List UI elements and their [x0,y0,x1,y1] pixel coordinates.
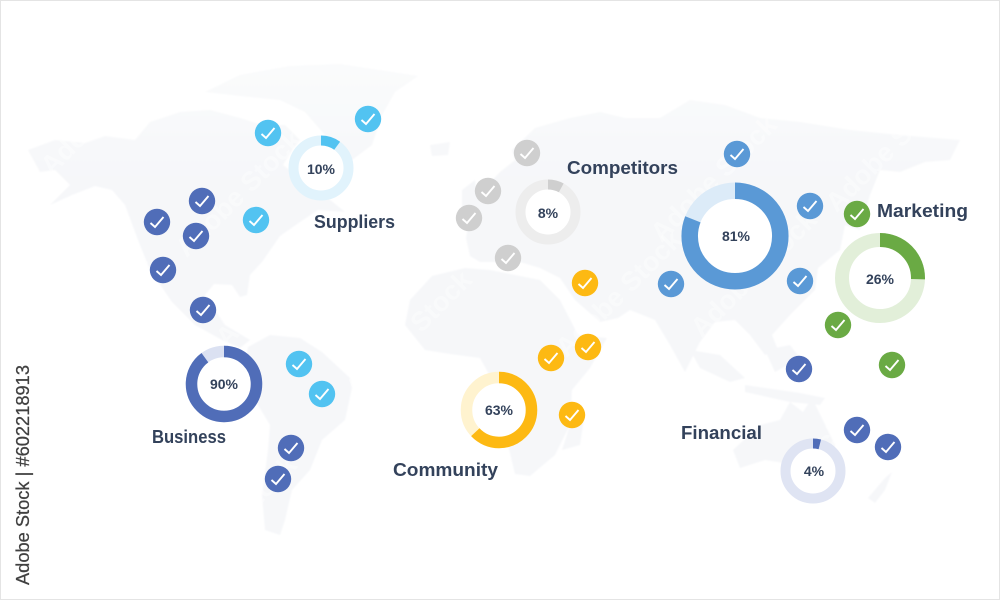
watermarks: Adobe Stock [170,124,308,263]
map: australia [733,398,835,476]
label: suppliers: Suppliers [314,212,395,232]
check markers: green [825,201,905,378]
watermarks: Adobe Stock [835,439,973,578]
donut: community 63%: 63% [485,402,514,418]
map: africa [405,268,607,476]
world map background [28,64,960,535]
watermarks: Adobe Stock [45,394,183,533]
label: community: Community [393,460,498,480]
donut: large blue 81%: 81% [722,228,751,244]
watermarks: Adobe Stock [685,204,823,343]
donut: competitors 8%: 8% [538,205,559,221]
check markers: gray [456,140,540,271]
map: iceland and uk [430,142,478,210]
watermarks: Adobe Stock [15,244,153,383]
side stock id text: Adobe Stock | #602218913 [12,365,33,585]
map: new zealand [868,472,892,503]
watermarks: Adobe Stock [165,449,303,588]
watermarks: Adobe Stock [210,214,348,353]
check markers: indigo [144,188,901,492]
watermarks: Adobe Stock [375,394,513,533]
label: marketing: Marketing [877,201,968,221]
donut: suppliers 10%: 10% [307,161,336,177]
watermarks: Adobe Stock [550,224,688,363]
check markers: blue [658,141,823,297]
donut: business 90% [192,352,256,416]
watermarks: Adobe Stock [645,109,783,248]
watermarks: Adobe Stock [370,54,508,193]
donut: large blue 81% [690,191,780,281]
check markers: yellow [538,270,601,428]
map: greenland [205,64,418,168]
watermarks: Adobe Stock [495,424,633,563]
donut: competitors 8% [520,184,576,240]
donut: business 90%: 90% [210,376,239,392]
donut: financial 4%: 4% [804,463,825,479]
map: south america [245,335,352,535]
map: southeast asia islands [690,345,825,405]
watermarks: Adobe Stock [820,79,958,218]
donut: financial 4% [786,444,840,498]
label: business: Business [152,427,226,447]
map: eurasia [466,100,960,372]
map: north america [28,110,345,348]
watermarks: Adobe Stock [715,414,853,553]
donut: suppliers 10% [294,140,348,196]
donut: marketing 26%: 26% [866,271,895,287]
label: financial: Financial [681,423,762,443]
watermarks: Adobe Stock [340,264,478,403]
watermarks: Adobe Stock [35,42,173,181]
donut: community 63% [466,378,532,442]
donut: marketing 26% [842,240,918,316]
map: madagascar [562,412,585,450]
check markers: light blue [243,106,381,407]
label: competitors: Competitors [567,158,678,178]
